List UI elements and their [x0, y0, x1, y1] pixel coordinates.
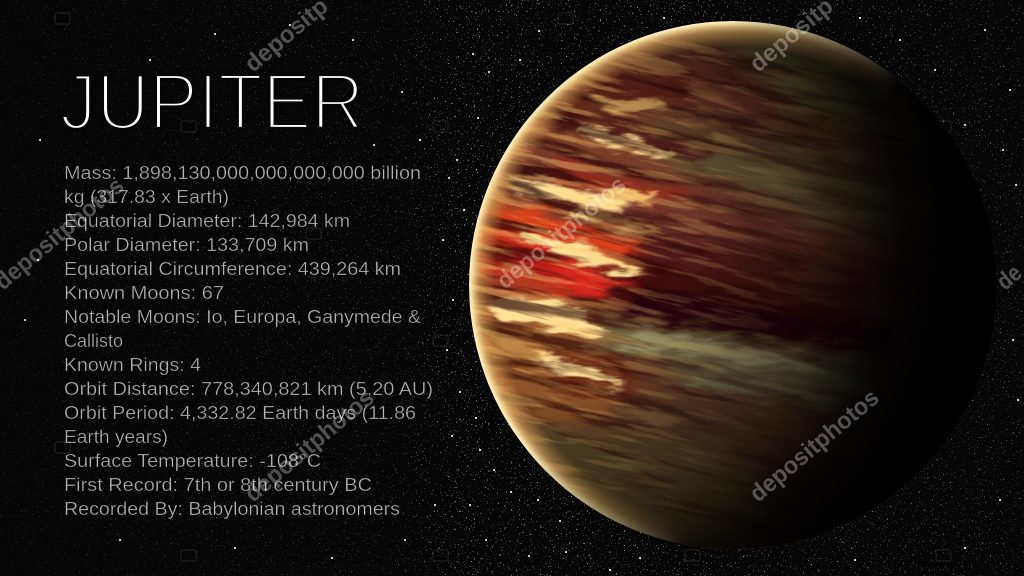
- fact: orbit period: Orbit Period: 4,332.82 Earth days (11.86: [64, 402, 416, 423]
- fact: notable moons: Notable Moons: Io, Europa, Ganymede &: [64, 306, 422, 327]
- planet: Jupiter: [469, 21, 997, 549]
- fact: notable moons continued: Callisto: [64, 330, 123, 351]
- fact: equatorial circumference: Equatorial Circumference: 439,264 km: [64, 258, 401, 279]
- fact: polar diameter: Polar Diameter: 133,709 km: [64, 234, 309, 255]
- fact: surface temperature: Surface Temperature: -108°C: [64, 450, 321, 471]
- fact: recorded by: Recorded By: Babylonian astronomers: [64, 498, 400, 519]
- watermarks: depositphotos: [240, 384, 379, 508]
- fact: equatorial diameter: Equatorial Diameter: 142,984 km: [64, 210, 350, 231]
- fact: known rings: Known Rings: 4: [64, 354, 201, 375]
- fact: orbit period continued: Earth years): [64, 426, 168, 447]
- watermarks: depositphotos: [745, 384, 884, 508]
- lit limb: [469, 21, 895, 542]
- texture: storm streaks: [469, 36, 860, 516]
- planet facts text: [64, 162, 433, 519]
- watermarks: depositphotos: [492, 171, 631, 295]
- fact: known moons: Known Moons: 67: [64, 282, 224, 303]
- terminator shadow: [469, 21, 997, 549]
- title: JUPITER: [60, 57, 364, 146]
- cloud bands: [470, 40, 904, 549]
- fact: first record: First Record: 7th or 8th century BC: [64, 474, 372, 495]
- fact: mass continued: kg (317.83 x Earth): [64, 186, 229, 207]
- fact: orbit distance: Orbit Distance: 778,340,821 km (5.20 AU): [64, 378, 433, 399]
- fact: mass: Mass: 1,898,130,000,000,000,000 billion: [64, 162, 421, 183]
